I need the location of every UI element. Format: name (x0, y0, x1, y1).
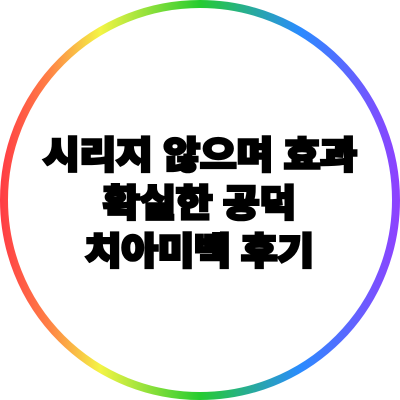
title line 3: 치아미백 후기 (85, 231, 314, 273)
title (43, 135, 357, 273)
title line 2: 확실한 공덕 (103, 183, 296, 225)
title line 1: 시리지 않으며 효과 (43, 135, 357, 177)
